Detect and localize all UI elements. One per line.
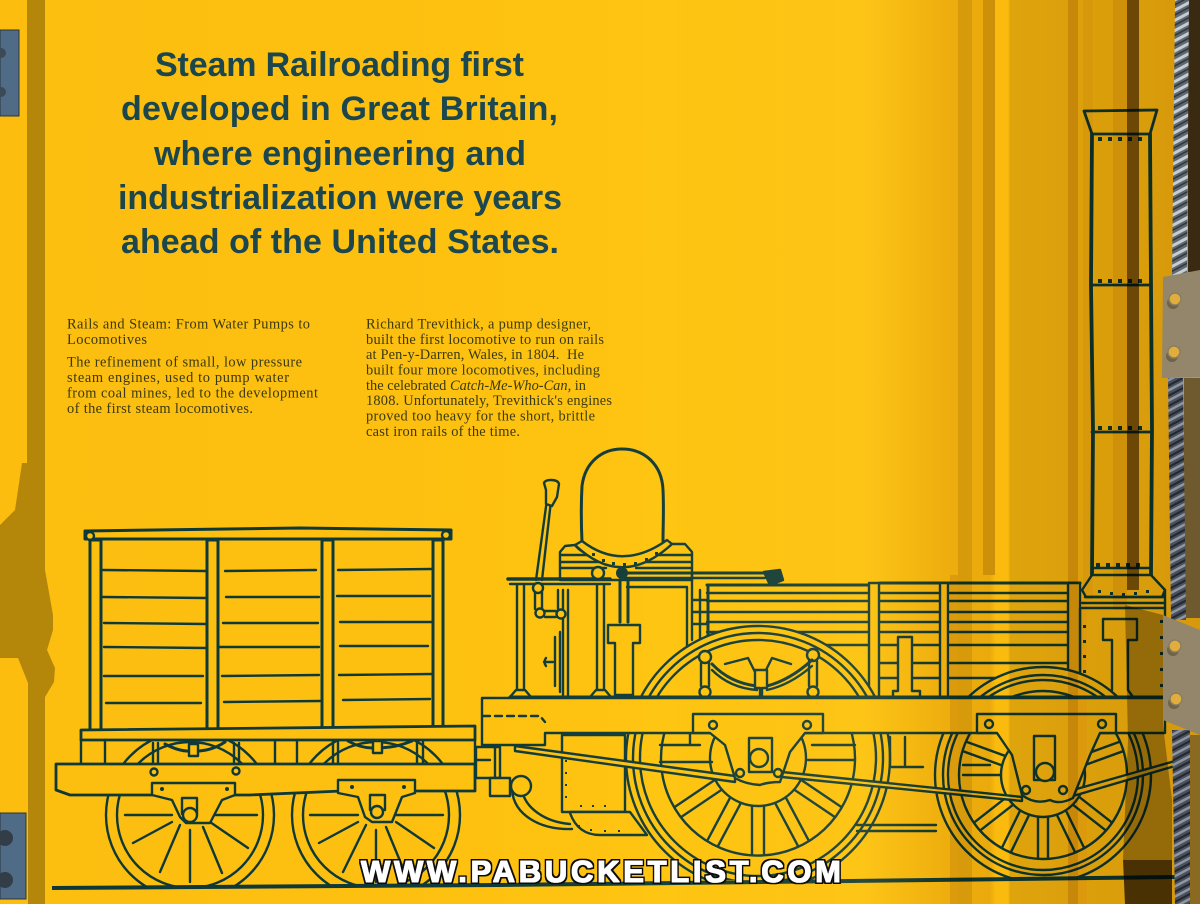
connecting rods xyxy=(515,746,1175,801)
title: ahead of the United States. xyxy=(121,223,559,261)
title: where engineering and xyxy=(153,135,526,173)
text block: Richard Trevithick xyxy=(366,316,612,440)
text block: rails and steam: from coal mines, led to the development xyxy=(67,386,318,402)
title: developed in Great Britain, xyxy=(121,90,558,128)
firebox and pipework xyxy=(476,735,936,835)
metal plate: top left xyxy=(0,30,19,116)
horn plate: driving wheel xyxy=(693,714,823,785)
dome xyxy=(581,449,663,542)
boiler planking xyxy=(692,583,1165,697)
wagon body xyxy=(85,528,451,730)
text block: rails and steam: steam engines, used to pump water xyxy=(67,370,289,386)
text block: rails and steam: Rails and Steam: From Water Pumps to xyxy=(67,316,310,332)
steel cable xyxy=(1168,0,1190,904)
controls and cylinder xyxy=(508,480,783,697)
watermark: WWW.PABUCKETLIST.COM xyxy=(361,854,841,889)
title xyxy=(118,46,562,261)
ground rail line xyxy=(52,877,1175,888)
dark wall right of cable xyxy=(1184,0,1200,904)
text block: Richard Trevithick: proved too heavy for the short, brittle xyxy=(366,408,595,424)
mounting bracket: lower xyxy=(1163,615,1200,735)
main frame xyxy=(482,697,1165,745)
text block: Richard Trevithick: built four more locomotives, including xyxy=(366,362,600,378)
text block: Richard Trevithick: the celebrated Catch-Me-Who-Can, in xyxy=(366,378,586,394)
trailing wheel xyxy=(935,667,1151,883)
text block: rails and steam: The refinement of small, low pressure xyxy=(67,354,302,370)
text block: Richard Trevithick: 1808. Unfortunately, Trevithick's engines xyxy=(366,393,612,409)
text block: Richard Trevithick: cast iron rails of the time. xyxy=(366,424,520,440)
text block: rails and steam: Locomotives xyxy=(67,332,147,348)
title: Steam Railroading first xyxy=(155,46,524,84)
saddle block xyxy=(560,540,692,580)
chimney xyxy=(1082,110,1165,608)
illustration: locomotive xyxy=(476,110,1175,890)
horn plate: trailing wheel xyxy=(977,714,1116,802)
wagon axle guards xyxy=(152,780,415,823)
text block: Richard Trevithick: at Pen-y-Darren, Wales, in 1804. He xyxy=(366,347,584,363)
text block: Richard Trevithick: built the first locomotive to run on rails xyxy=(366,332,604,348)
text block: rails and steam xyxy=(67,316,318,417)
illustration: wagon xyxy=(56,528,475,899)
title: industrialization were years xyxy=(118,179,562,217)
driving wheel xyxy=(626,626,890,890)
metal plate: bottom left xyxy=(0,813,26,899)
wagon wheels xyxy=(104,741,462,886)
mounting bracket: upper xyxy=(1162,270,1200,378)
smokebox xyxy=(1080,590,1165,697)
text block: Richard Trevithick: Richard Trevithick, a pump designer, xyxy=(366,316,591,332)
leaf spring xyxy=(699,649,819,698)
wagon underframe xyxy=(56,726,475,795)
text block: rails and steam: of the first steam locomotives. xyxy=(67,401,253,417)
